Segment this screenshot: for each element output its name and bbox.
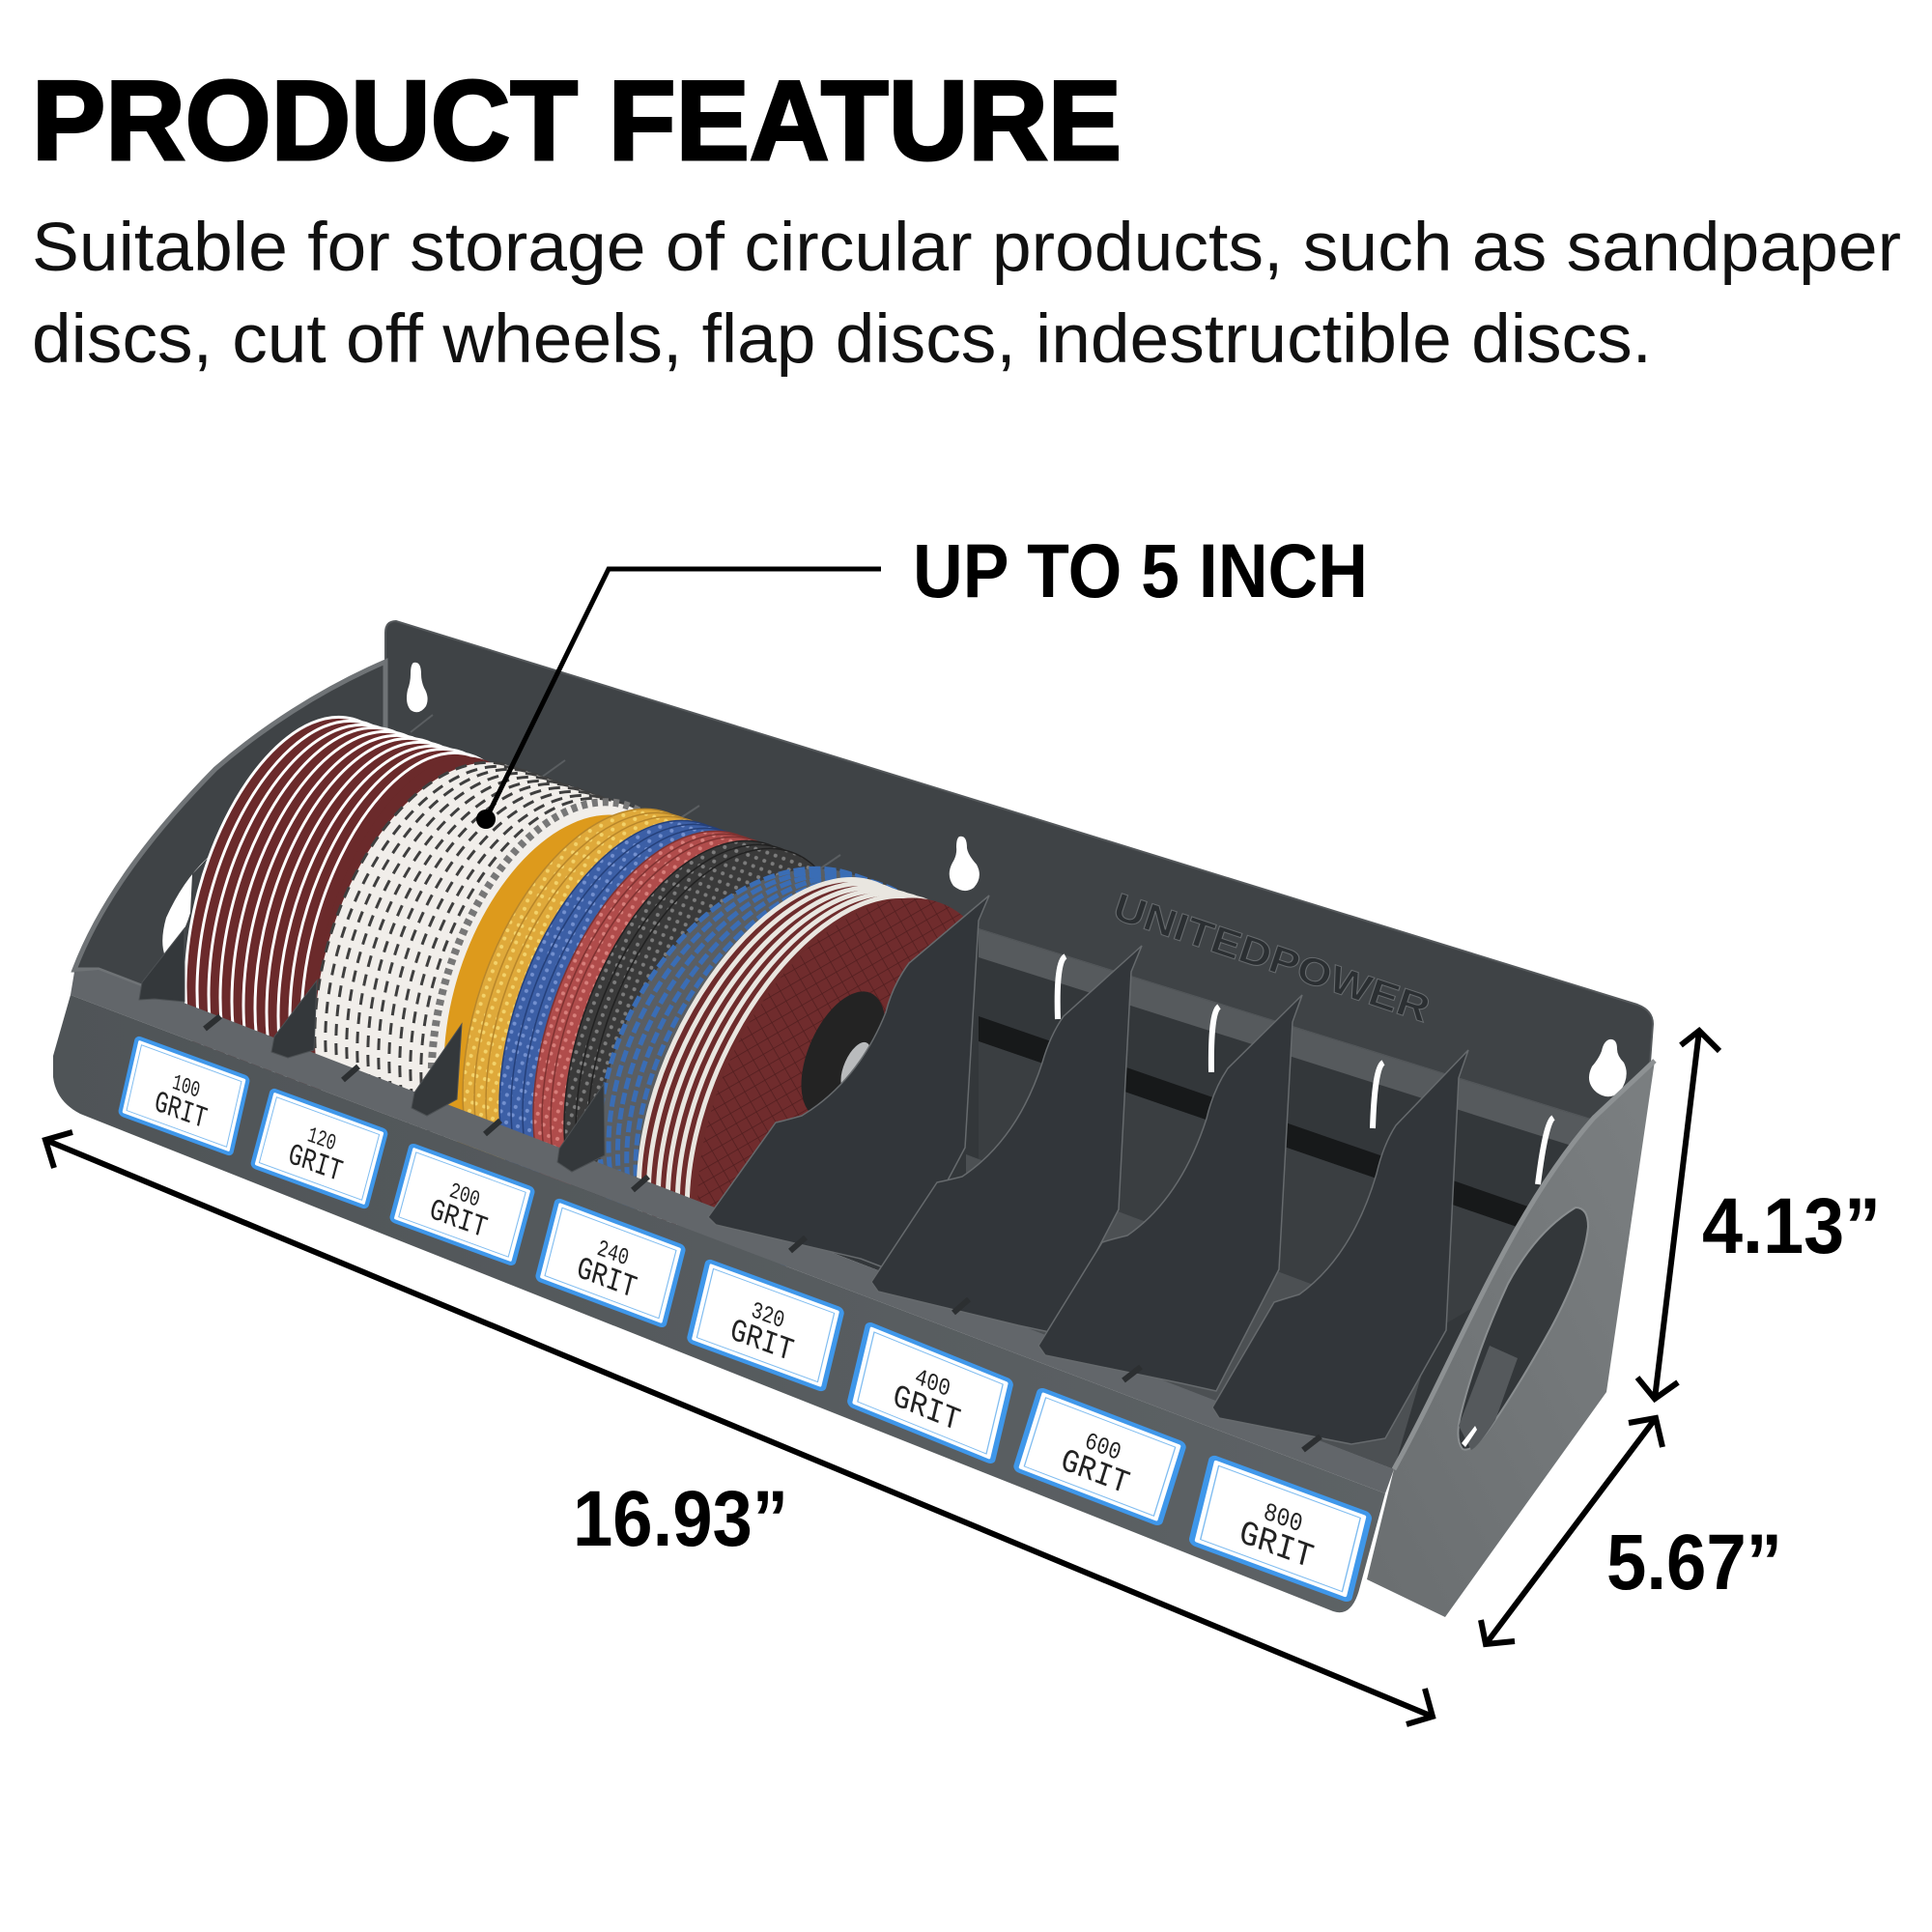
right handle slot: [1458, 1208, 1588, 1450]
rear slot ticks: [411, 715, 840, 873]
front lip: [71, 970, 1394, 1493]
label: 320 grit: GRIT: [726, 1313, 797, 1370]
back plate: [385, 621, 1653, 1121]
front panel: [53, 995, 1385, 1612]
black hub ring: [802, 991, 885, 1111]
label: 100 grit: [120, 1037, 248, 1154]
lower rear wall: [979, 1041, 1576, 1330]
tray interior: [99, 752, 1594, 1469]
arrow: depth: [1481, 1418, 1662, 1644]
label: 400 grit: [849, 1323, 1011, 1463]
divider 7: [1038, 995, 1302, 1391]
label: 200 grit: 200: [446, 1178, 483, 1213]
label: 240 grit: GRIT: [573, 1251, 639, 1307]
label: 120 grit: 120: [304, 1123, 338, 1157]
discs: zebra flap discs: [637, 877, 963, 1225]
description text: Suitable for storage of circular products, such as sandpaper: [32, 210, 1901, 286]
icon: keyhole 3: [1589, 1039, 1627, 1096]
label: 100 grit: 100: [170, 1070, 202, 1105]
dimension: 5.67 in: 5.67”: [1606, 1519, 1782, 1606]
callout: up to 5 inch: UP TO 5 INCH: [913, 527, 1368, 613]
white sliver: [1462, 1426, 1477, 1447]
discs: white cut-off wheels: [268, 729, 738, 1242]
divider 8: [1212, 1050, 1468, 1444]
divider 5: [708, 895, 989, 1273]
product: disc storage rack: [53, 621, 1655, 1617]
label: 400 grit: 400: [912, 1363, 952, 1404]
description text: [32, 210, 1901, 378]
discs: blue thin grinding wheels: [533, 812, 1001, 1332]
callout: up to 5 inch: [476, 527, 1368, 829]
discs: yellow, blue, red and black flap wheels: [412, 773, 901, 1295]
label: 600 grit: GRIT: [1056, 1442, 1133, 1503]
lip notches: [205, 1016, 1321, 1450]
label: 400 grit: GRIT: [890, 1378, 963, 1440]
label: 600 grit: 600: [1081, 1428, 1124, 1467]
floor visible through slot: [1459, 1346, 1518, 1450]
white wall slits: [1058, 956, 1553, 1184]
side plate rim: [1394, 1061, 1655, 1469]
icon: keyhole 2: [950, 837, 980, 891]
arrow: height: [1637, 1031, 1719, 1399]
icon: keyhole 1: [407, 663, 428, 712]
label: 120 grit: [252, 1090, 386, 1208]
label: 100 grit: GRIT: [152, 1085, 210, 1137]
arrow: length: [45, 1132, 1433, 1724]
divider 6: [871, 946, 1142, 1333]
label: 800 grit: [1191, 1457, 1370, 1601]
orange wheel label: [399, 782, 741, 1231]
label: 120 grit: GRIT: [285, 1138, 346, 1190]
metal hub: [840, 1041, 869, 1083]
left side plate: [74, 662, 385, 1080]
label: 800 grit: 800: [1261, 1498, 1305, 1540]
tray floor: [966, 1154, 1435, 1469]
discs: maroon sanding discs: [146, 692, 581, 1183]
label: 320 grit: 320: [749, 1297, 787, 1335]
left handle hole: [162, 856, 210, 956]
label: 240 grit: [537, 1200, 684, 1326]
label: 600 grit: [1015, 1389, 1184, 1524]
label: 240 grit: 240: [594, 1235, 632, 1272]
dimension: 4.13 in: 4.13”: [1702, 1182, 1881, 1270]
black stripe: [979, 1016, 1576, 1247]
title: PRODUCT FEATURE: [32, 57, 1122, 184]
short divider stubs: [139, 928, 605, 1172]
right side plate: [1367, 1061, 1655, 1617]
flap disc face: [697, 898, 963, 1206]
label: 800 grit: GRIT: [1236, 1514, 1317, 1578]
embossed brand name: UNITEDPOWER: [1108, 886, 1435, 1031]
label: 200 grit: GRIT: [426, 1194, 491, 1247]
description text: discs, cut off wheels, flap discs, indestructible discs.: [32, 301, 1652, 378]
rear ledge: [979, 929, 1594, 1147]
dimension: 16.93 in: 16.93”: [573, 1475, 788, 1563]
label: 200 grit: [391, 1145, 533, 1264]
label: 320 grit: [689, 1261, 842, 1390]
